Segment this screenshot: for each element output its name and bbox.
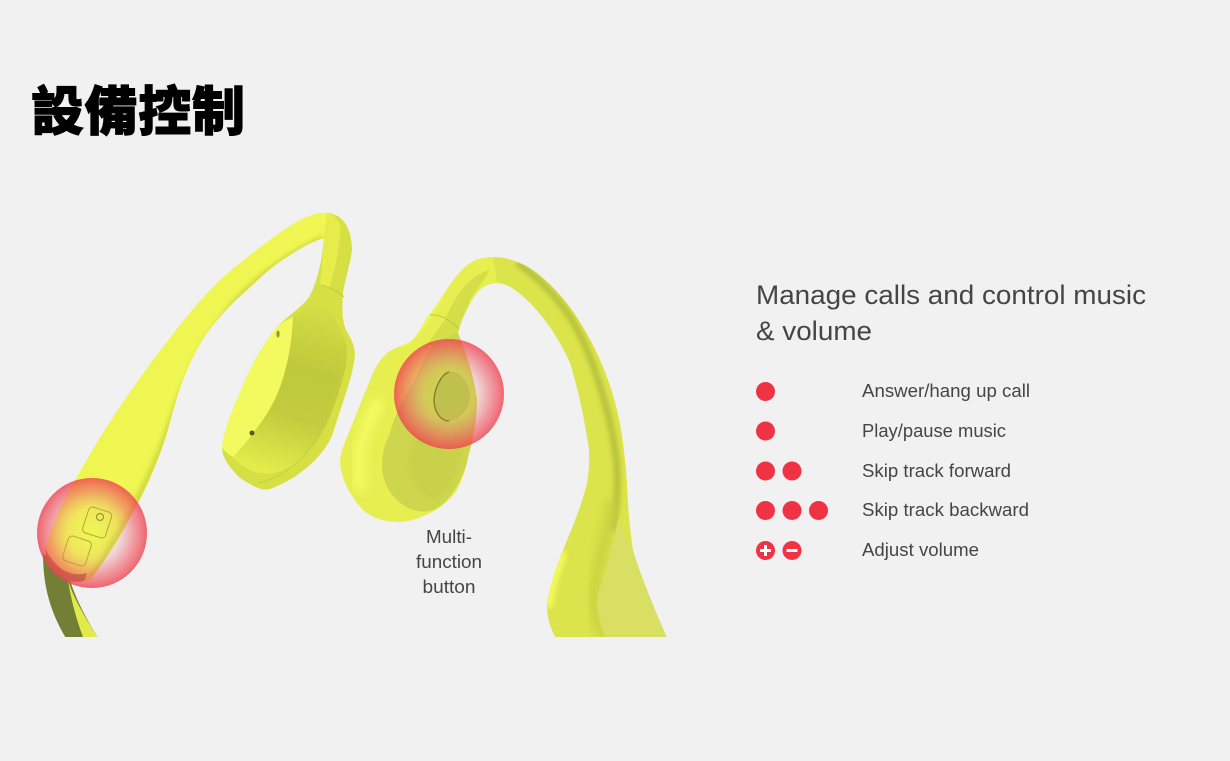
neck band [45,213,327,581]
hook top highlight [320,213,340,288]
heading: manage calls: & volume [756,316,872,346]
earbud inner shade [233,308,347,474]
label: multi-function button: button [422,577,476,597]
top band shading [427,270,490,345]
end shadow [45,548,87,582]
cap line [322,285,344,297]
earbud body [340,257,497,522]
row: adjust volume: Adjust volume [862,540,979,560]
right earphone [340,257,668,640]
row: skip track backward: Skip track backward [862,500,1029,520]
row: adjust volume [756,540,979,560]
stem shadow [594,500,612,640]
lower stem panel [597,515,668,640]
earbud outer face [222,317,293,457]
title: 設備控制 [31,83,245,142]
heading: manage calls [756,280,1146,346]
highlight circle: multi-function button [394,339,504,449]
product illustration: yellow earphones [43,213,668,640]
stem highlight [549,552,564,607]
dark inner band at bottom left [43,553,99,640]
bright highlight [358,400,380,490]
row: skip track forward [756,461,1011,481]
earbud body and hook [222,213,355,490]
multi-function button [434,372,470,421]
row: answer or hang up call [756,381,1030,401]
hook and stem [493,257,668,640]
row: answer or hang up call: Answer/hang up call [862,381,1030,401]
row: play or pause music: Play/pause music [862,421,1006,441]
inner panel [382,333,480,512]
label: multi-function button: function [416,552,482,572]
label: multi-function button [416,527,482,597]
inner panel core [408,420,470,500]
band underside shade [90,238,324,580]
left earphone [43,213,355,640]
row: play or pause music [756,421,1006,441]
label: multi-function button: Multi- [426,527,472,547]
control buttons [82,506,113,539]
sensor dots [276,330,280,338]
row: skip track backward [756,500,1029,520]
control list [756,381,1030,560]
heading: manage calls: Manage calls and control music [756,280,1146,310]
hook dark stripe [517,263,617,530]
highlight circle: left controls [37,478,147,588]
earbud rim line [258,352,347,483]
seam line [430,315,459,329]
row: skip track forward: Skip track forward [862,461,1011,481]
